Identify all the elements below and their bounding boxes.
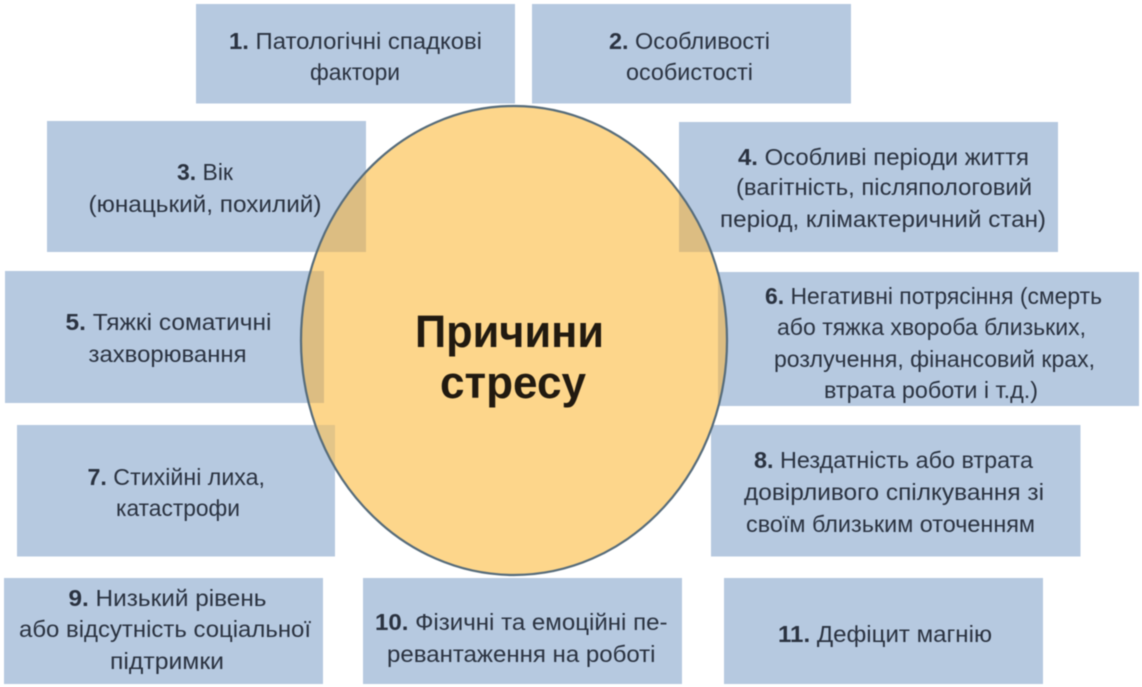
panel: cause 6: 6. Негативні потрясіння (смерть	[765, 283, 1102, 309]
panel: cause 9: або відсутність соціальної	[19, 616, 312, 642]
central circle	[299, 104, 729, 577]
panel: cause 8: 8. Нездатність або втрата	[754, 447, 1033, 473]
panel: cause 10	[363, 578, 682, 684]
panel: cause 5	[5, 271, 324, 403]
panel: cause 7: 7. Стихійні лиха,	[88, 464, 265, 490]
panel: cause 6: розлучення, фінансовий крах,	[774, 346, 1095, 372]
title	[415, 306, 604, 408]
panel: cause 3: (юнацький, похилий)	[88, 191, 322, 217]
panel: cause 2	[532, 4, 851, 104]
panel: cause 4	[679, 122, 1058, 252]
panel: cause 3	[47, 121, 366, 252]
panel: cause 10: ревантаження на роботі	[387, 641, 656, 667]
panel: cause 5: захворювання	[88, 341, 246, 367]
panel: cause 5: 5. Тяжкі соматичні	[66, 309, 272, 335]
panel: cause 7: катастрофи	[116, 495, 240, 521]
panel: cause 9: підтримки	[110, 648, 224, 674]
panel: cause 8: довірливого спілкування зі	[744, 479, 1044, 505]
panel: cause 2: 2. Особливості	[609, 28, 770, 54]
panel: cause 1	[196, 4, 515, 104]
title: стресу	[440, 357, 586, 408]
panel: cause 9: 9. Низький рівень	[68, 585, 267, 611]
panel: cause 11: 11. Дефіцит магнію	[778, 621, 992, 647]
panel: cause 6	[718, 272, 1139, 406]
panel: cause 6: або тяжка хвороба близьких,	[777, 314, 1086, 340]
panel: cause 11	[724, 578, 1043, 684]
panel: cause 1: 1. Патологічні спадкові	[229, 28, 482, 54]
panel: cause 8: своїм близьким оточенням	[746, 511, 1035, 537]
panel: cause 4: 4. Особливі періоди життя	[738, 144, 1029, 170]
panel: cause 2: особистості	[626, 59, 753, 85]
panel: cause 6: втрата роботи і т.д.)	[824, 377, 1038, 403]
panel: cause 4: період, клімактеричний стан)	[720, 206, 1046, 232]
panel: cause 3: 3. Вік	[177, 159, 234, 185]
panel: cause 4: (вагітність, післяпологовий	[736, 174, 1032, 200]
panel: cause 10: 10. Фізичні та емоційні пе-	[375, 609, 668, 635]
panel: cause 7	[17, 425, 335, 556]
panel: cause 8	[711, 425, 1080, 556]
title: Причини	[415, 306, 604, 357]
panel: cause 1: фактори	[310, 59, 400, 85]
panel: cause 9	[4, 578, 323, 684]
